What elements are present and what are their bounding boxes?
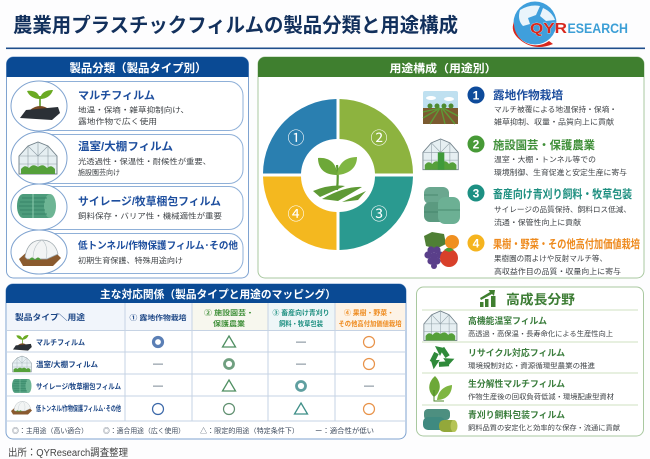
donut chart: ④ xyxy=(288,205,304,224)
donut chart: ① xyxy=(288,129,304,148)
panel: high growth areas xyxy=(416,287,644,436)
card: greenhouse film: 施設園芸向け xyxy=(78,167,120,177)
application 3 xyxy=(424,184,632,227)
card: mulch film: 地温・保墒・雑草抑制向け、 xyxy=(78,104,189,114)
column headers: ③ 畜産向け青刈り xyxy=(272,308,330,317)
application 4 xyxy=(424,232,640,276)
card: low tunnel film xyxy=(11,230,243,274)
column headers xyxy=(15,308,402,328)
application 3: 3 xyxy=(473,186,480,200)
application 2: 温室・大棚・トンネル等での xyxy=(494,154,596,164)
heading: high growth areas xyxy=(480,290,575,307)
row: mulch film xyxy=(13,335,374,351)
panel heading: product classification xyxy=(6,57,248,77)
card: silage film xyxy=(11,184,243,230)
title: 農業用プラスチックフィルムの製品分類と用途構成 xyxy=(13,13,458,37)
application 4: 4 xyxy=(473,236,480,250)
source note: 出所：QYResearch調査整理 xyxy=(8,446,128,459)
item: forage wrap film: 飼料品質の安定化と効率的な保存・流通に貢献 xyxy=(468,423,620,432)
panel: product classification xyxy=(6,57,248,278)
card: greenhouse film: 光透過性・保温性・耐候性が重要、 xyxy=(78,156,211,166)
donut chart xyxy=(263,99,413,250)
row: greenhouse film: 温室/大棚フィルム xyxy=(36,359,98,369)
icon: sprout over field xyxy=(313,157,366,202)
item: biodegradable mulch film: 生分解性マルチフィルム xyxy=(468,378,565,389)
table legend xyxy=(12,426,374,435)
icon: growth chart xyxy=(480,290,496,307)
item: recyclable film: リサイクル対応フィルム xyxy=(468,347,565,358)
row: mulch film: マルチフィルム xyxy=(36,338,85,347)
application 1: 1 xyxy=(473,88,480,102)
row: low tunnel film: 低トンネル/作物保護フィルム･その他 xyxy=(36,403,121,413)
card: greenhouse film: 温室/大棚フィルム xyxy=(78,139,173,153)
row: greenhouse film xyxy=(12,356,374,372)
card: mulch film: マルチフィルム xyxy=(78,89,155,102)
table heading xyxy=(6,284,406,303)
icon: bales xyxy=(423,409,458,432)
application 3: 流通・保管性向上に貢献 xyxy=(494,217,582,227)
panel heading: product classification: 製品分類（製品タイプ別） xyxy=(70,61,206,75)
heading: high growth areas: 高成長分野 xyxy=(506,292,575,307)
table legend: ◎：主用途（高い適合） xyxy=(12,426,88,435)
application 1 xyxy=(423,86,617,126)
item: forage wrap film xyxy=(423,409,620,432)
card: low tunnel film: 低トンネル/作物保護フィルム･その他 xyxy=(78,239,238,252)
item: high performance greenhouse film: 高機能温室フィルム xyxy=(468,315,547,326)
application 4: 高収益作目の品質・収量向上に寄与 xyxy=(494,266,622,276)
donut chart: ③ xyxy=(370,205,388,224)
column headers: 保護農業 xyxy=(213,319,245,328)
application 2 xyxy=(423,136,628,177)
item: high performance greenhouse film: 高透過・高保温・長寿命化による生産性向上 xyxy=(468,329,613,338)
table heading: 主な対応関係（製品タイプと用途のマッピング） xyxy=(100,287,336,301)
item: recyclable film: 環境規制対応・資源循環型農業の推進 xyxy=(468,361,595,370)
column headers: ② 施設園芸・ xyxy=(204,308,254,317)
logo: QYResearch: QYR xyxy=(530,20,567,37)
application 2: 環境制御、生育促進と安定生産に寄与 xyxy=(494,167,628,177)
application 4: 果樹園の雨よけや反射マルチ等、 xyxy=(494,253,607,263)
table legend: △：限定的用途（特定条件下） xyxy=(200,426,299,435)
donut chart: ② xyxy=(370,129,388,148)
application 1: 雑草抑制、収量・品質向上に貢献 xyxy=(494,116,615,126)
panel heading: applications: 用途構成（用途別） xyxy=(390,61,496,75)
panel: applications xyxy=(258,57,644,278)
card: silage film: 飼料保存・バリア性・機械適性が重要 xyxy=(78,210,223,220)
card: mulch film xyxy=(11,81,243,131)
logo: QYResearch xyxy=(513,2,628,47)
item: biodegradable mulch film xyxy=(429,376,614,401)
panel heading: applications xyxy=(258,57,644,77)
row: low tunnel film xyxy=(11,402,374,414)
item: high performance greenhouse film xyxy=(424,311,613,340)
icon: silage bales xyxy=(424,187,460,224)
item: recyclable film xyxy=(429,346,595,372)
logo: QYResearch: ESEARCH xyxy=(568,21,628,36)
card: mulch film: 露地作物で広く使用 xyxy=(78,116,157,126)
item: biodegradable mulch film: 作物生産後の回収負荷低減・環境配慮型資材 xyxy=(468,392,614,401)
application 1: 露地作物栽培 xyxy=(493,88,564,102)
column headers: その他高付加価値栽培 xyxy=(338,319,402,328)
application 1: マルチ被覆による地温保持・保墒・ xyxy=(494,104,617,114)
icon: leaves xyxy=(429,376,452,401)
column headers: 製品タイプ＼用途 xyxy=(15,312,85,322)
row: silage film: サイレージ/牧草梱包フィルム xyxy=(36,381,121,391)
icon: fruits and vegetables xyxy=(424,232,459,269)
column headers: ① 露地作物栽培 xyxy=(130,313,187,322)
card: greenhouse film xyxy=(11,132,243,184)
application 2: 2 xyxy=(473,138,480,152)
item: forage wrap film: 青刈り飼料包装フィルム xyxy=(468,409,565,420)
panel: mapping table xyxy=(6,284,406,439)
card: silage film: サイレージ/牧草梱包フィルム xyxy=(78,194,221,208)
card: low tunnel film: 初期生育保護、特殊用途向け xyxy=(78,255,183,265)
icon: open field xyxy=(423,91,458,124)
icon: recycle xyxy=(429,346,456,372)
icon: greenhouse xyxy=(423,139,458,170)
application 3: サイレージの品質保持、飼料ロス低減、 xyxy=(494,204,631,214)
row: silage film xyxy=(12,379,374,393)
table legend: ー：適合性が低い xyxy=(315,426,374,435)
column headers: ④ 果樹・野菜・ xyxy=(344,308,394,317)
column headers: 飼料・牧草包装 xyxy=(279,319,323,328)
application 2: 施設園芸・保護農業 xyxy=(493,138,595,152)
application 3: 畜産向け青刈り飼料・牧草包装 xyxy=(493,187,632,201)
table header row backgrounds xyxy=(7,303,405,330)
table legend: ◎：適合用途（広く使用） xyxy=(103,426,185,435)
